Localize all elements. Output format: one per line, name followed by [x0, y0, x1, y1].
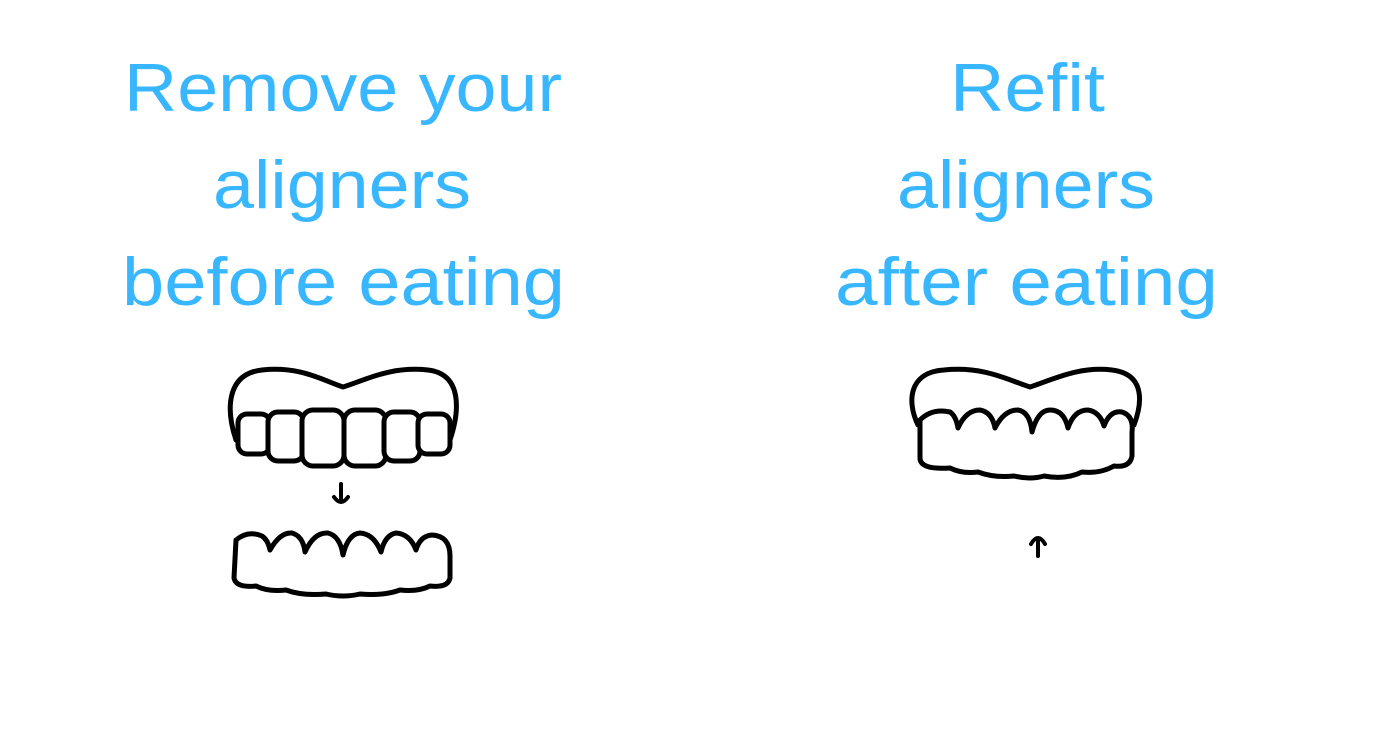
heading: remove aligners: Remove your: [124, 50, 562, 126]
lower aligner: [234, 533, 450, 596]
heading: remove aligners: aligners: [213, 147, 471, 223]
upper gum: [230, 369, 456, 440]
gum: [912, 369, 1140, 425]
heading: refit aligners: [835, 50, 1218, 320]
heading: refit aligners: after eating: [835, 244, 1218, 320]
heading: remove aligners: [122, 50, 565, 320]
heading: remove aligners: before eating: [122, 244, 565, 320]
aligner on teeth: [920, 410, 1132, 478]
icon: refitted aligners: [912, 369, 1140, 556]
arrow up: [1031, 538, 1045, 556]
heading: refit aligners: Refit: [950, 50, 1105, 126]
upper teeth: [238, 410, 450, 466]
icon: removing aligners: [230, 369, 456, 596]
heading: refit aligners: aligners: [897, 147, 1155, 223]
arrow down: [334, 484, 348, 502]
